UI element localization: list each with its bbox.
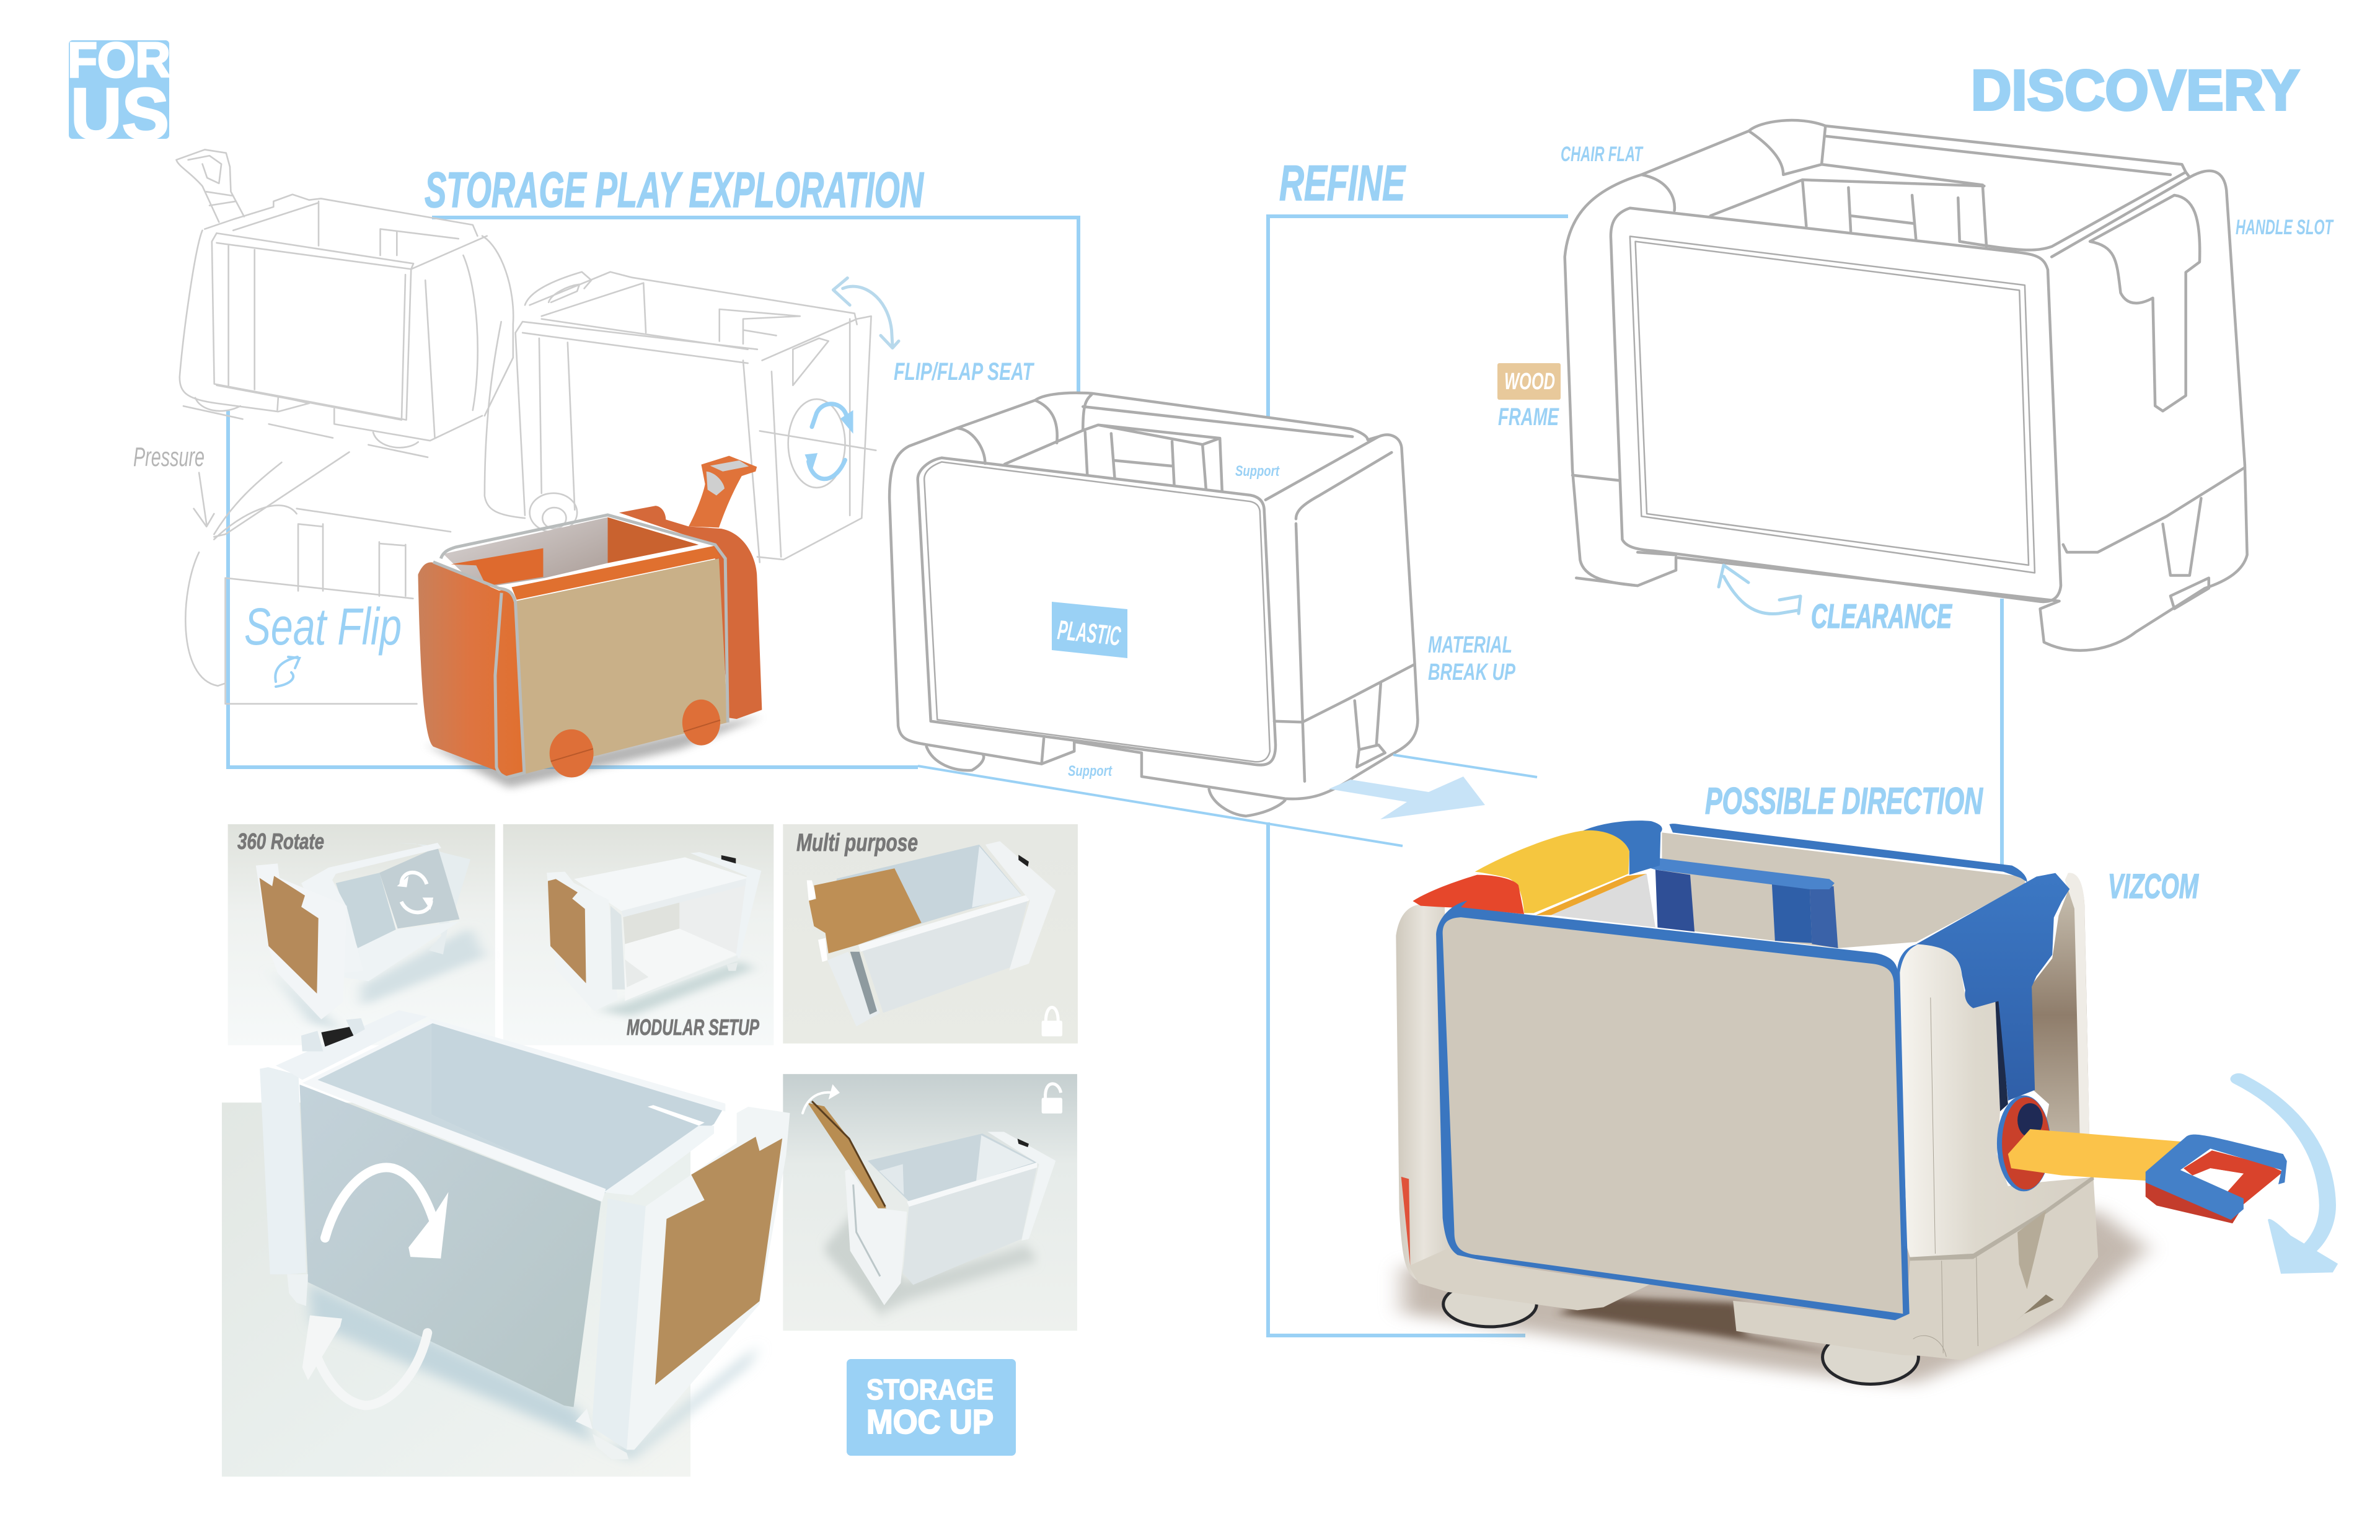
heading: discovery: DISCOVERY — [1971, 59, 2299, 122]
badge: storage moc up — [847, 1359, 1016, 1456]
label: support bottom: Support — [1068, 763, 1113, 780]
rear panel — [619, 506, 762, 719]
side body — [1859, 873, 2098, 1360]
logo: FOR US: FOR — [68, 32, 170, 87]
rear handle — [689, 456, 757, 527]
label: frame: FRAME — [1498, 403, 1559, 431]
arrow: handle swing — [2239, 1079, 2338, 1274]
frame: refine box — [1268, 216, 2002, 1335]
wood panel — [517, 558, 728, 774]
label: material break up — [1428, 632, 1515, 685]
label: chair flat: CHAIR FLAT — [1561, 143, 1644, 166]
label: wood — [1497, 363, 1561, 400]
sketch: seat flip — [185, 452, 451, 704]
sketch: flip flap seat cart — [485, 272, 876, 562]
frame: storage play exploration box — [228, 218, 1078, 767]
label: clearance: CLEARANCE — [1811, 597, 1953, 635]
label: flip flap seat: FLIP/FLAP SEAT — [894, 358, 1035, 385]
blue flap, arm, pivot and pull handle — [1897, 873, 2287, 1246]
colour product render — [1396, 821, 2287, 1384]
label: support top: Support — [1235, 463, 1280, 480]
label: material break up: MATERIAL — [1428, 632, 1512, 658]
badge: storage moc up: MOC UP — [866, 1402, 994, 1441]
label: plastic: PLASTIC — [1056, 615, 1122, 652]
sketch: refined cart — [889, 393, 1417, 816]
label: modular setup: MODULAR SETUP — [627, 1014, 760, 1040]
floor lines — [918, 755, 1537, 846]
badge: storage moc up: STORAGE — [866, 1373, 994, 1406]
heading: storage play exploration: STORAGE PLAY EXPLORATION — [425, 162, 924, 218]
left side — [418, 562, 524, 778]
handwritten note: seat flip: Seat Flip — [244, 597, 402, 656]
label: multi purpose: Multi purpose — [796, 829, 918, 856]
handwritten note: seat flip — [244, 597, 402, 687]
icon: flip arrow — [833, 278, 899, 348]
label: material break up: BREAK UP — [1428, 659, 1515, 685]
front rim — [511, 546, 720, 600]
handwritten note: pressure: Pressure — [133, 442, 205, 472]
metal band — [433, 515, 728, 778]
photo: 360 rotate — [228, 824, 495, 1045]
interior and top rails — [1413, 821, 2027, 948]
label: possible direction: POSSIBLE DIRECTION — [1705, 780, 1983, 822]
logo: FOR US: US — [71, 73, 169, 154]
label: plastic — [1052, 602, 1127, 658]
label: vizcom: VIZCOM — [2108, 866, 2199, 905]
sketch: backpack storage cart — [176, 149, 513, 457]
front panel — [1436, 900, 1910, 1320]
icon: rotate arrows — [804, 404, 853, 479]
interior wall — [443, 517, 607, 588]
icon: clearance arrow — [1719, 565, 1800, 614]
heading: refine: REFINE — [1279, 156, 1406, 211]
photo: modular setup — [503, 824, 774, 1045]
orange cart render — [418, 456, 762, 788]
sketch: final refined cart — [1565, 120, 2247, 651]
photo: multi purpose — [783, 824, 1078, 1044]
photo: large rotating mock-up — [222, 1010, 790, 1477]
logo: FOR US — [68, 32, 170, 154]
label: 360 rotate: 360 Rotate — [237, 829, 324, 854]
label: wood: WOOD — [1504, 369, 1555, 395]
arrow: forward direction — [1329, 777, 1485, 819]
shadow — [426, 716, 762, 788]
photo: unlock flap — [783, 1074, 1077, 1331]
base: shadow, wheels, feet, left column — [1396, 904, 2148, 1384]
wheels — [550, 729, 594, 778]
